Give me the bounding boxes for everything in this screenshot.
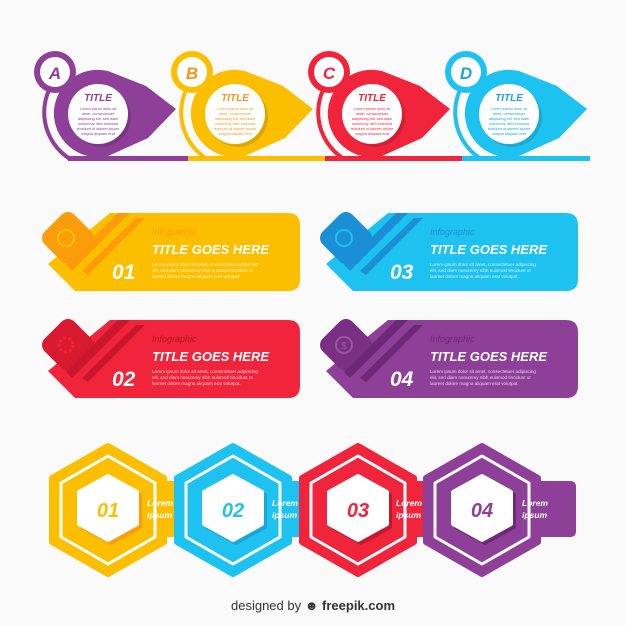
item A: amet, consectetuer [82,112,115,116]
item D: adipiscing elit, sed diam [489,117,529,121]
item D: D [460,64,472,83]
banner 04: $ [341,341,347,352]
item B: tincidunt ut laoreet dolore [214,127,256,131]
item D: nonummy nibh euismod [489,122,529,126]
banner 01: 01 [112,261,135,284]
hexagon labels: Lorem ipsum: ipsum [522,510,547,520]
item D [445,51,587,159]
banner 02: Lorem ipsum dolor sit amet, consectetuer adipiscing [152,369,258,374]
item D: TITLE [495,93,523,104]
hexagon labels: Lorem ipsum: ipsum [396,510,421,520]
item C: TITLE [358,93,386,104]
item A: Lorem ipsum dolor sit [80,107,117,111]
item D: Lorem ipsum dolor sit [491,107,528,111]
banner 01: Infographic [152,227,197,237]
hexagon labels: Lorem ipsum: Lorem [522,498,548,508]
banner 02: Infographic [152,334,197,344]
banner 04: Lorem ipsum dolor sit amet, consectetuer adipiscing [430,369,536,374]
hexagon labels: Lorem ipsum [147,498,548,520]
item B [171,51,313,159]
item B: magna aliquam erat [218,132,253,136]
banner 03: TITLE GOES HERE [430,242,547,257]
item C: C [323,64,336,83]
item A: tincidunt ut laoreet dolore [77,127,119,131]
banner 04 [316,315,578,398]
banner 04: Infographic [430,334,475,344]
hexagon labels: Lorem ipsum: Lorem [272,498,298,508]
item D: tincidunt ut laoreet dolore [488,127,530,131]
banner 03: Lorem ipsum dolor sit amet, consectetuer adipiscing [430,262,536,267]
banner 01: TITLE GOES HERE [152,242,269,257]
banner 03: laoreet dolore magna aliquam erat volutpat. [430,274,519,279]
hexagon 01 [52,446,186,574]
banner 02: laoreet dolore magna aliquam erat volutpat. [152,381,241,386]
banner 02 [38,315,300,398]
item B: nonummy nibh euismod [215,122,255,126]
hexagon 04: 04 [471,500,493,522]
connecting line: top row [68,156,590,161]
banner 04: 04 [390,368,414,391]
item D: magna aliquam erat [492,132,527,136]
item C: tincidunt ut laoreet dolore [351,127,393,131]
hexagon labels: Lorem ipsum: Lorem [147,498,173,508]
item A: magna aliquam erat [81,132,116,136]
hexagon 02 [177,446,311,574]
item A [34,51,176,159]
item B: Lorem ipsum dolor sit [217,107,254,111]
item C: Lorem ipsum dolor sit [354,107,391,111]
banner 03: elit, sed diam nonummy nibh euismod tincidunt ut [430,268,531,273]
banner 02: TITLE GOES HERE [152,349,269,364]
banner 03: Infographic [430,227,475,237]
banner 01 [38,208,300,291]
item C: amet, consectetuer [356,112,389,116]
hexagon 04 [426,446,576,574]
banner 04: TITLE GOES HERE [430,349,547,364]
item D: amet, consectetuer [493,112,526,116]
item B: TITLE [221,93,249,104]
hexagon 03: 03 [347,500,369,522]
banner 01: laoreet dolore magna aliquam erat volutpat. [152,274,241,279]
item B: B [186,64,198,83]
hexagon labels: Lorem ipsum: Lorem [396,498,422,508]
item C [308,51,450,159]
hexagon 01: 01 [97,500,119,522]
hexagon 03 [302,446,436,574]
footer credit: designed by ☻ freepik.com [231,598,395,613]
banner 01: Lorem ipsum dolor sit amet, consectetuer adipiscing [152,262,258,267]
banner 03: 03 [390,261,414,284]
hexagon 02: 02 [222,500,244,522]
item A: nonummy nibh euismod [78,122,118,126]
banner 04: laoreet dolore magna aliquam erat volutpat. [430,381,519,386]
hexagon labels: Lorem ipsum: ipsum [272,510,297,520]
item B: adipiscing elit, sed diam [215,117,255,121]
item A: adipiscing elit, sed diam [78,117,118,121]
item A: TITLE [84,93,112,104]
item B: amet, consectetuer [219,112,252,116]
banner 02: elit, sed diam nonummy nibh euismod tincidunt ut [152,375,253,380]
banner 02: 02 [112,368,136,391]
item A: A [48,64,61,83]
item C: magna aliquam erat [355,132,390,136]
hexagon labels: Lorem ipsum: ipsum [147,510,172,520]
banner 01: elit, sed diam nonummy nibh euismod tincidunt ut [152,268,253,273]
banner 03 [316,208,578,291]
item C: adipiscing elit, sed diam [352,117,392,121]
banner 04: elit, sed diam nonummy nibh euismod tincidunt ut [430,375,531,380]
item C: nonummy nibh euismod [352,122,392,126]
